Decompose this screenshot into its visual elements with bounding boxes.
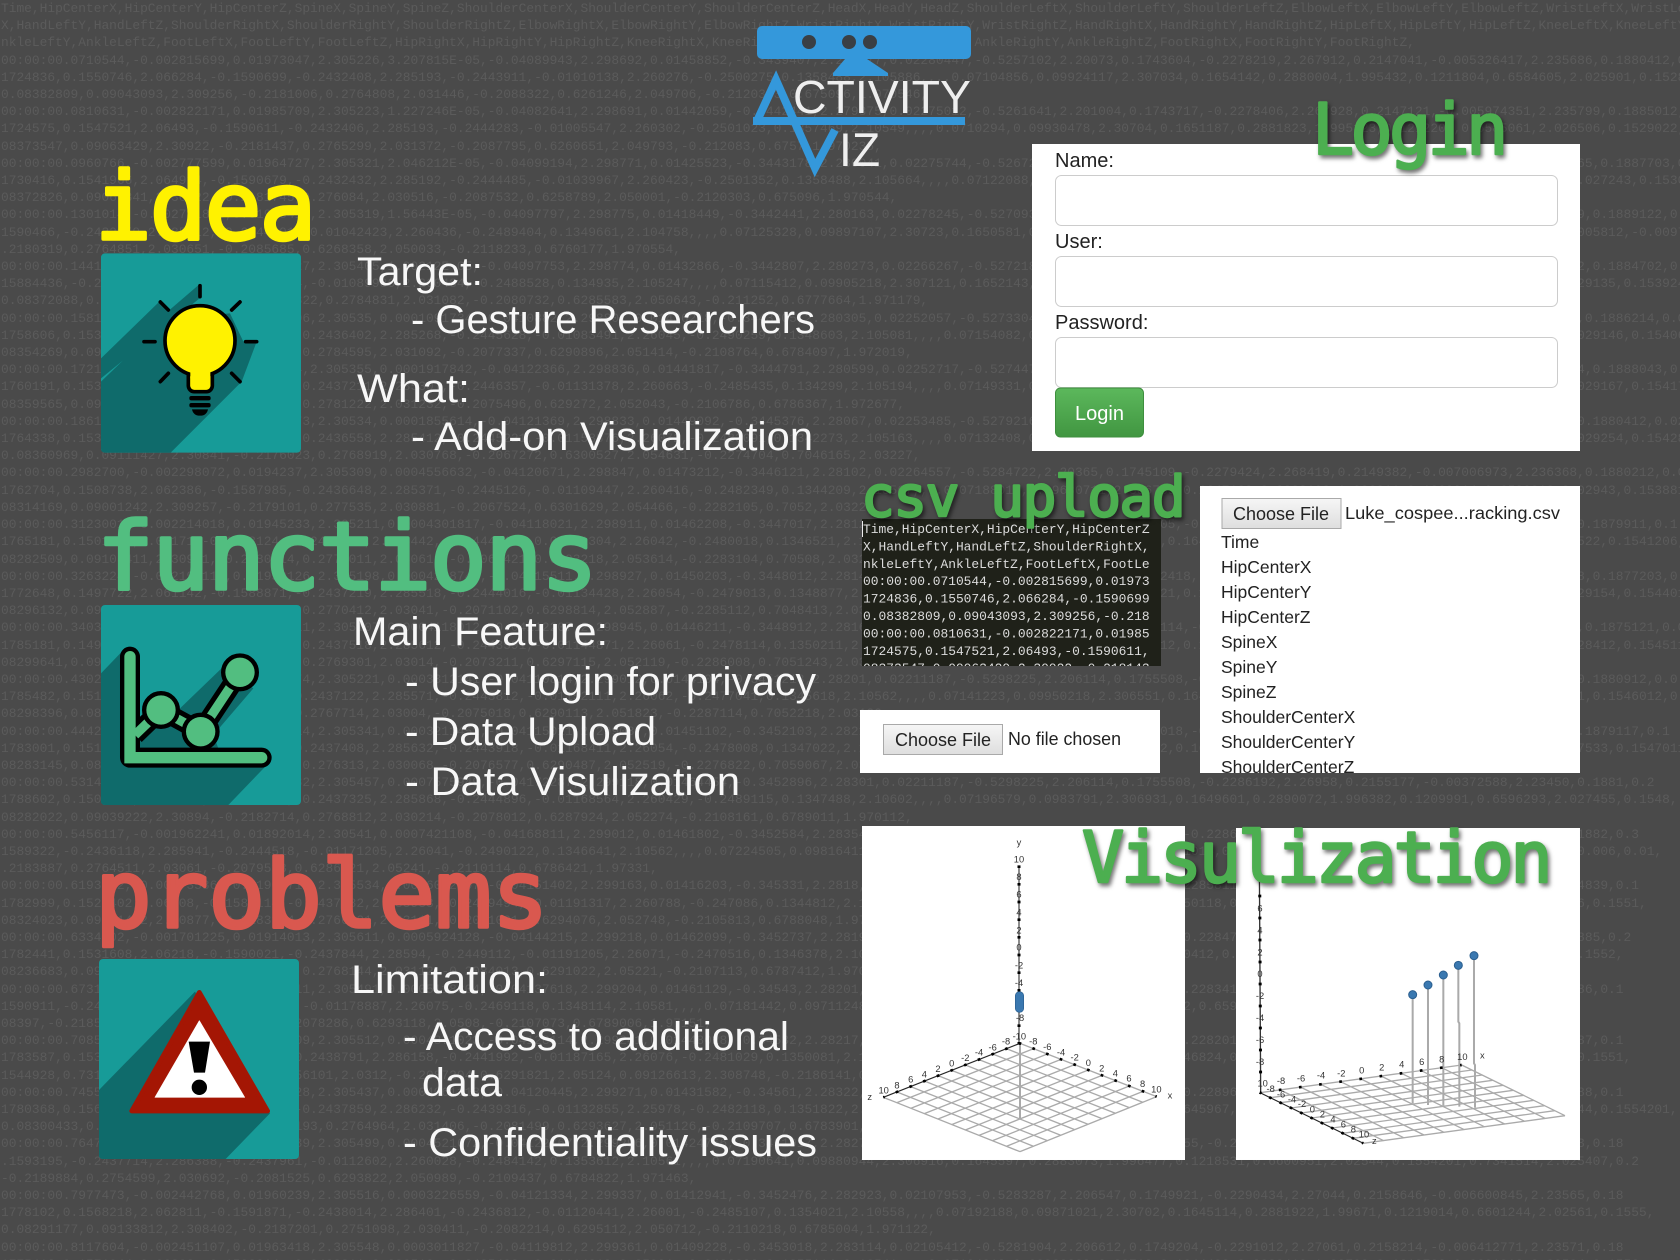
text: limitation: data: [422, 1061, 503, 1105]
text: target and what: Target:: [357, 250, 483, 294]
chart: 3d plot front view: 2: [1016, 925, 1022, 935]
chart: 3d plot front view: 0: [1086, 1058, 1091, 1068]
panel: csv file preview: 08373547,0.09063429,2.30922,-0.218143: [863, 661, 1150, 676]
panel: file chooser empty: Choose File: [895, 730, 991, 750]
chart: 3d plot with data points: -2: [1256, 991, 1264, 1001]
chart: 3d plot front view: -6: [989, 1042, 997, 1052]
text: target and what: What:: [357, 367, 470, 411]
panel: csv file preview: [862, 519, 1161, 676]
chart: 3d plot front view: 6: [908, 1075, 913, 1085]
chart: 3d plot front view: -4: [1057, 1047, 1065, 1057]
chart: 3d plot front view: -8: [1029, 1036, 1037, 1046]
text: target and what: - Add-on Visualization: [411, 415, 813, 459]
chart: 3d plot with data points: 8: [1439, 1055, 1444, 1065]
chart: 3d plot front view: -2: [1015, 960, 1023, 970]
chart: 3d plot front view: z: [867, 1092, 872, 1102]
panel: login form: Login: [1075, 403, 1124, 425]
chart: 3d plot with data points: 0: [1310, 1104, 1315, 1114]
text: main feature: - Data Upload: [405, 710, 656, 754]
panel: file chooser with column list: SpineZ: [1221, 682, 1277, 702]
chart: 3d plot with data points: 6: [1341, 1119, 1346, 1129]
chart: 3d plot front view: 6: [1016, 889, 1022, 899]
chart: 3d plot with data points: -6: [1297, 1074, 1305, 1084]
chart: 3d plot with data points: z: [1372, 1136, 1377, 1146]
chart: 3d plot with data points: 10: [1457, 1052, 1468, 1062]
chart: 3d plot front view: y: [1017, 838, 1022, 848]
chart: 3d plot front view: x: [1168, 1090, 1173, 1100]
icon: warning triangle: [99, 959, 299, 1159]
panel: csv file preview: X,HandLeftY,HandLeftZ,ShoulderRightX,: [863, 539, 1150, 554]
text: main feature: Main Feature:: [353, 610, 608, 654]
panel: file chooser with column list: ShoulderCenterX: [1221, 707, 1356, 727]
chart: 3d plot with data points: x: [1480, 1050, 1485, 1060]
chart: 3d plot front view: 4: [1113, 1069, 1118, 1079]
chart: 3d plot with data points: 8: [1351, 1124, 1356, 1134]
panel: login form: [1032, 144, 1580, 451]
panel: csv file preview: 00:00:00.0710544,-0.002815699,0.01973: [863, 574, 1150, 589]
panel: login form: User:: [1055, 231, 1103, 253]
chart: 3d plot front view: 6: [1126, 1074, 1132, 1084]
panel: csv file preview: 00:00:00.0810631,-0.002822171,0.01985: [863, 626, 1150, 641]
chart: 3d plot front view: 0: [1016, 943, 1022, 953]
chart: 3d plot with data points: -8: [1256, 1057, 1264, 1067]
chart: 3d plot with data points: 2: [1257, 947, 1263, 957]
chart: 3d plot with data points: 0: [1257, 969, 1263, 979]
chart: 3d plot with data points: 2: [1379, 1063, 1384, 1073]
chart: 3d plot with data points: -8: [1267, 1084, 1275, 1094]
heading: problems: problems: [95, 841, 549, 950]
heading: functions: functions: [97, 503, 596, 612]
chart: 3d plot with data points: 6: [1257, 903, 1263, 913]
panel: login form: Password:: [1055, 312, 1148, 334]
text: main feature: - Data Visulization: [405, 760, 740, 804]
panel: file chooser with column list: HipCenterZ: [1221, 607, 1311, 627]
icon: line chart: [101, 605, 301, 805]
chart: 3d plot with data points: -6: [1277, 1089, 1285, 1099]
chart: 3d plot with data points: -6: [1256, 1035, 1264, 1045]
heading: visulization: Visulization: [1082, 817, 1549, 899]
text: limitation: - Access to additional: [403, 1015, 789, 1059]
chart: 3d plot front view: 0: [949, 1059, 954, 1069]
chart: 3d plot front view: 8: [894, 1080, 900, 1090]
text: limitation: Limitation:: [351, 958, 548, 1002]
chart: 3d plot front view: -8: [1002, 1037, 1010, 1047]
chart: 3d plot front view: -6: [1043, 1042, 1051, 1052]
chart: 3d plot with data points: 4: [1399, 1060, 1404, 1070]
panel: csv file preview: 0.08382809,0.09043093,2.309256,-0.218: [863, 609, 1150, 624]
panel: file chooser with column list: ShoulderCenterY: [1221, 732, 1356, 752]
text: main feature: - User login for privacy: [405, 660, 816, 704]
chart: 3d plot front view: 2: [1099, 1063, 1104, 1073]
chart: 3d plot with data points: -8: [1277, 1076, 1285, 1086]
panel: csv file preview: Time,HipCenterX,HipCenterY,HipCenterZ: [863, 522, 1150, 537]
logo: Activity Viz: IZ: [839, 123, 880, 176]
chart: 3d plot front view: -10: [1013, 1031, 1026, 1041]
panel: login form: Name:: [1055, 150, 1114, 172]
chart: 3d plot front view: 4: [922, 1069, 927, 1079]
chart: 3d plot with data points: -2: [1337, 1068, 1345, 1078]
panel: file chooser with column list: HipCenterX: [1221, 557, 1312, 577]
panel: file chooser with column list: Choose File: [1233, 504, 1329, 524]
chart: 3d plot with data points: 6: [1419, 1057, 1424, 1067]
chart: 3d plot with data points: 0: [1359, 1065, 1364, 1075]
panel: file chooser with column list: Luke_cospee...racking.csv: [1345, 503, 1560, 524]
chart: 3d plot with data points: -4: [1288, 1094, 1296, 1104]
chart: 3d plot with data points: -4: [1256, 1013, 1264, 1023]
chart: 3d plot front view: 4: [1016, 907, 1022, 917]
chart: 3d plot with data points: 10: [1359, 1129, 1369, 1139]
text: target and what: - Gesture Researchers: [411, 298, 815, 342]
chart: 3d plot front view: 8: [1140, 1079, 1145, 1089]
chart: 3d plot front view: 10: [1151, 1084, 1162, 1094]
panel: csv file preview: nkleLeftY,AnkleLeftZ,FootLeftX,FootLe: [863, 557, 1150, 572]
logo: Activity Viz: CTIVITY: [793, 71, 971, 123]
panel: csv file preview: 1724575,0.1547521,2.06493,-0.1590611,: [863, 644, 1150, 659]
chart: 3d plot front view: -4: [975, 1048, 983, 1058]
chart: 3d plot front view: 10: [1014, 855, 1024, 865]
chart: 3d plot with data points: 4: [1257, 925, 1263, 935]
panel: file chooser empty: [860, 710, 1160, 773]
chart: 3d plot with data points: -4: [1317, 1071, 1325, 1081]
chart: 3d plot with data points: -2: [1298, 1099, 1306, 1109]
icon: light bulb: [101, 253, 301, 453]
text: target and what: [357, 250, 815, 459]
heading: idea: idea: [95, 153, 315, 262]
logo: Activity Viz: [753, 26, 971, 176]
panel: file chooser with column list: [1200, 486, 1580, 777]
panel: file chooser empty: No file chosen: [1008, 729, 1121, 749]
chart: 3d plot with data points: 2: [1320, 1109, 1325, 1119]
chart: 3d plot front view: 8: [1016, 872, 1022, 882]
chart: 3d plot with data points: 4: [1330, 1114, 1336, 1124]
heading: csv upload: csv upload: [861, 465, 1184, 530]
panel: file chooser with column list: HipCenterY: [1221, 582, 1312, 602]
chart: 3d plot front view: -2: [961, 1053, 969, 1063]
chart: 3d plot front view: -4: [1015, 978, 1023, 988]
chart: 3d plot front view: -8: [1016, 1013, 1024, 1023]
text: limitation: [351, 958, 817, 1165]
chart: 3d plot front view: -2: [1071, 1053, 1079, 1063]
heading: login: Login: [1312, 89, 1505, 171]
chart: 3d plot with data points: 10: [1257, 1079, 1268, 1089]
chart: 3d plot front view: [862, 826, 1185, 1160]
chart: 3d plot front view: 10: [878, 1086, 889, 1096]
text: limitation: - Confidentiality issues: [403, 1121, 817, 1165]
panel: file chooser with column list: SpineY: [1221, 657, 1278, 677]
text: main feature: [353, 610, 816, 804]
panel: csv file preview: 1724836,0.1550746,2.066284,-0.1590699: [863, 592, 1150, 607]
panel: file chooser with column list: SpineX: [1221, 632, 1278, 652]
panel: file chooser with column list: Time: [1221, 532, 1259, 552]
chart: 3d plot with data points: [1236, 828, 1580, 1160]
chart: 3d plot front view: 2: [935, 1064, 941, 1074]
panel: file chooser with column list: ShoulderCenterZ: [1221, 757, 1355, 777]
